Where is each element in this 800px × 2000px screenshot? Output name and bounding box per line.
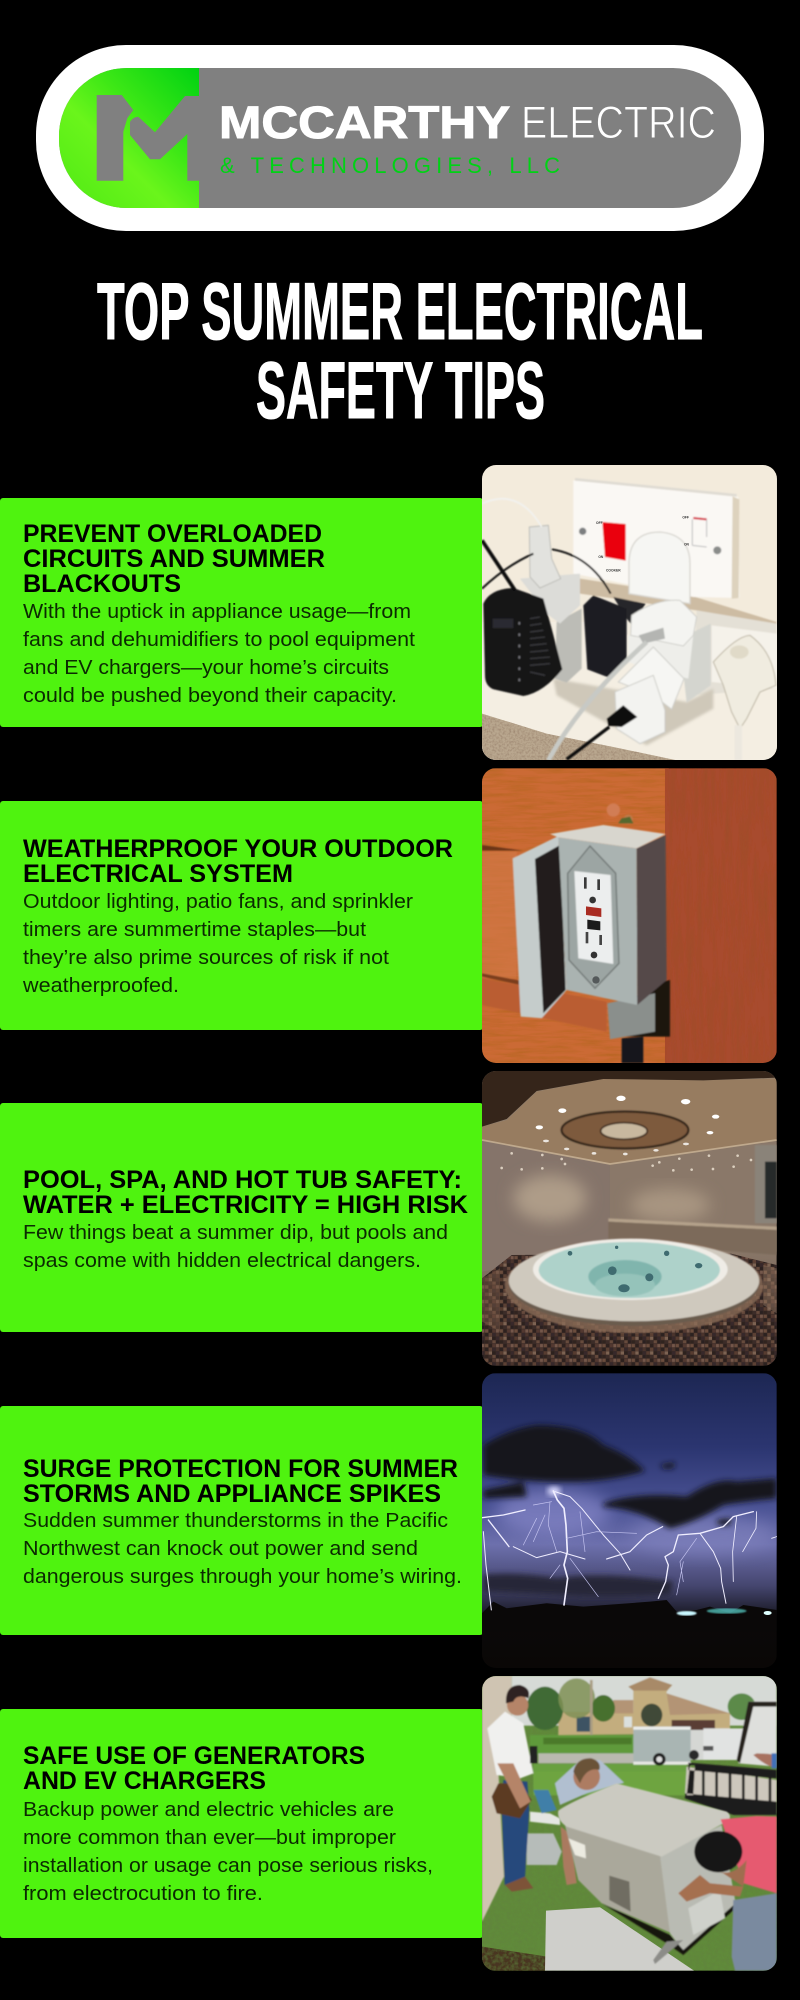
lightning <box>482 1491 777 1610</box>
heading <box>23 1455 458 1508</box>
panel: surge protection <box>0 1406 483 1635</box>
body text <box>23 1221 448 1272</box>
body text <box>22 890 413 997</box>
outlet details <box>584 877 587 889</box>
body text: spas come with hidden electrical dangers. <box>23 1249 421 1272</box>
switch labels: ON <box>684 542 690 546</box>
body text: Backup power and electric vehicles are <box>23 1798 394 1821</box>
black adapter 1 <box>483 588 562 696</box>
heading: WEATHERPROOF YOUR OUTDOOR <box>23 835 453 863</box>
city lights <box>677 1611 697 1616</box>
body text <box>23 1509 462 1588</box>
panel: weatherproof outdoor electrical <box>0 801 483 1030</box>
man in blue shirt <box>555 1760 624 1805</box>
truck <box>738 1700 777 1767</box>
photo: overloaded outlet <box>482 465 777 760</box>
cover plug <box>629 532 690 604</box>
icon: M monogram <box>97 95 200 181</box>
body text: Sudden summer thunderstorms in the Pacific <box>23 1509 448 1532</box>
logo wordmark: MCCARTHY <box>219 97 510 148</box>
body text: and EV chargers—your home’s circuits <box>23 656 389 679</box>
photo: generator install <box>482 1676 777 1971</box>
heading: POOL, SPA, AND HOT TUB SAFETY: <box>23 1166 462 1194</box>
logo badge <box>36 45 764 231</box>
heading <box>23 1166 468 1219</box>
conduit <box>607 993 655 1039</box>
body text: dangerous surges through your home’s wiring. <box>23 1565 462 1588</box>
toolbox and gear <box>527 1833 562 1865</box>
panel: generators and EV chargers <box>0 1709 483 1938</box>
body text: With the uptick in appliance usage—from <box>23 600 411 623</box>
photo: hot tub <box>482 1071 777 1366</box>
body text: from electrocution to fire. <box>23 1882 263 1905</box>
sky <box>512 1676 777 1726</box>
photo: lightning storm <box>482 1373 777 1668</box>
body text: Northwest can knock out power and send <box>23 1537 418 1560</box>
body text: installation or usage can pose serious risks, <box>23 1854 433 1877</box>
title <box>97 267 703 436</box>
grey adapter <box>555 609 582 683</box>
switch labels: OFF <box>682 516 689 520</box>
tree line <box>482 1600 776 1616</box>
heading <box>23 1742 365 1795</box>
wall <box>482 1676 512 1922</box>
heading: PREVENT OVERLOADED <box>23 520 322 548</box>
switch labels: OFF <box>596 521 603 525</box>
clouds <box>483 1425 777 1597</box>
jets <box>568 1246 702 1292</box>
heading <box>23 835 453 888</box>
heading: ELECTRICAL SYSTEM <box>23 860 293 888</box>
heading: CIRCUITS AND SUMMER <box>23 545 325 573</box>
body text: Outdoor lighting, patio fans, and sprinkler <box>23 890 413 913</box>
shadow under adapters <box>553 679 713 745</box>
body text: weatherproofed. <box>22 974 179 997</box>
heading: STORMS AND APPLIANCE SPIKES <box>23 1480 441 1508</box>
logo tagline: & TECHNOLOGIES, LLC <box>220 153 560 178</box>
house <box>557 1686 731 1736</box>
generator <box>563 1818 672 1933</box>
heading: BLACKOUTS <box>23 570 181 598</box>
man in pink shirt <box>732 1893 777 1971</box>
counter <box>482 714 677 760</box>
body text: fans and dehumidifiers to pool equipment <box>23 628 415 651</box>
photo: outdoor outlet <box>482 768 777 1063</box>
panel: prevent overloaded circuits <box>0 498 483 727</box>
cords <box>482 499 542 527</box>
body text: timers are summertime staples—but <box>23 918 366 941</box>
panel: pool spa hot tub <box>0 1103 483 1332</box>
title: SAFETY TIPS <box>256 346 545 436</box>
body text <box>23 600 415 707</box>
body text <box>23 1798 433 1905</box>
plate <box>568 846 619 988</box>
trees <box>527 1687 563 1730</box>
switch labels <box>596 516 690 572</box>
heading: SURGE PROTECTION FOR SUMMER <box>23 1455 458 1483</box>
heading: AND EV CHARGERS <box>23 1767 266 1795</box>
switch plate <box>573 480 739 598</box>
heading: SAFE USE OF GENERATORS <box>23 1742 365 1770</box>
mosaic base <box>482 1253 777 1366</box>
white stack adapter <box>684 624 710 702</box>
ceiling lights <box>536 1096 719 1155</box>
switch labels: ON <box>598 555 604 559</box>
logo wordmark light: ELECTRIC <box>521 97 716 148</box>
body text: Few things beat a summer dip, but pools and <box>23 1221 448 1244</box>
trailer and van <box>690 1728 704 1761</box>
slab <box>545 1907 694 1971</box>
man in white shirt <box>502 1780 529 1885</box>
body text: could be pushed beyond their capacity. <box>23 684 397 707</box>
heading <box>23 520 325 598</box>
black adapter 2 <box>613 597 646 625</box>
white plug <box>529 525 561 588</box>
box <box>558 837 637 1005</box>
body text: more common than ever—but improper <box>23 1826 396 1849</box>
lawn and road <box>530 1735 633 1755</box>
body text: they’re also prime sources of risk if not <box>23 946 389 969</box>
door <box>513 836 567 1018</box>
heading: WATER + ELECTRICITY = HIGH RISK <box>23 1191 468 1219</box>
switch labels: COOKER <box>606 568 621 572</box>
right socket <box>693 610 777 695</box>
sill <box>580 579 777 625</box>
